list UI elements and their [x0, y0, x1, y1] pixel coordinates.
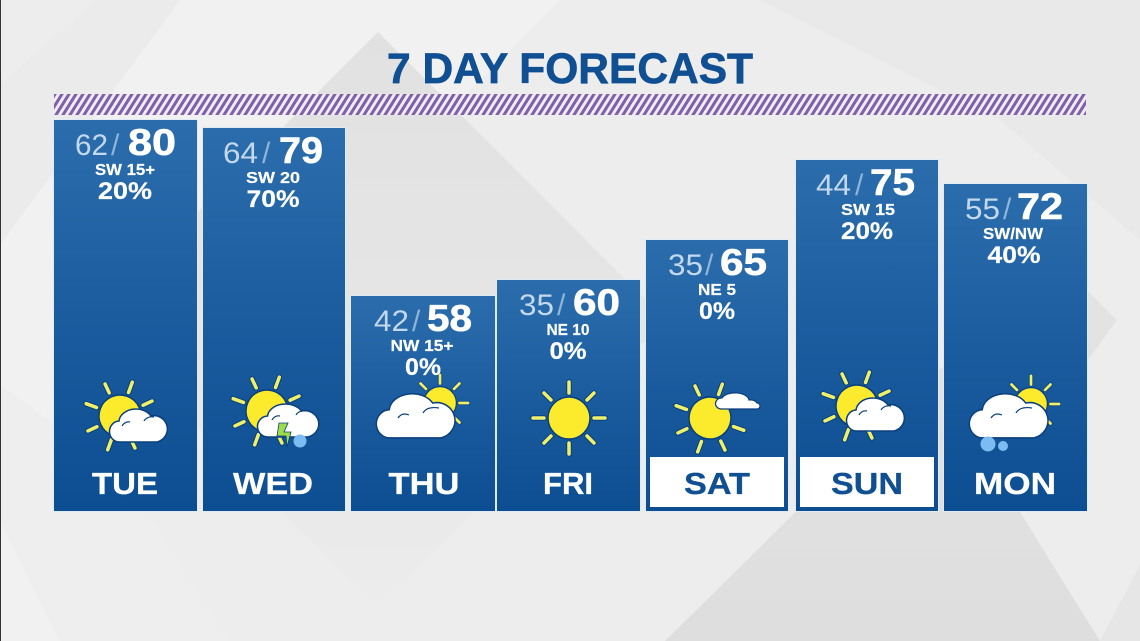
day label box [800, 457, 934, 507]
day label: SUN [831, 466, 903, 501]
panel: Saturday [646, 240, 788, 511]
temperatures: 62/80: 80 [128, 122, 176, 163]
temperatures: 64/79: 64 [223, 137, 258, 170]
temperatures: 55/72: 55 [965, 193, 1000, 226]
temperatures: 42/58 [374, 298, 472, 339]
temperatures: 55/72: 72 [1017, 186, 1063, 227]
temperatures: 44/75 [816, 162, 915, 203]
temperatures: 35/65 [668, 242, 767, 283]
temperatures: 62/80 [75, 122, 176, 163]
icon: partly cloudy [74, 370, 167, 462]
temperatures: 55/72 [965, 186, 1063, 227]
icon: partly cloudy [811, 360, 904, 452]
title: 7 DAY FORECAST [387, 45, 753, 93]
day label: SAT [684, 466, 750, 501]
day label: TUE [92, 466, 158, 501]
precipitation chance: 40% [988, 242, 1040, 269]
temperatures: 64/79: / [262, 137, 271, 170]
panel: Sunday [796, 160, 938, 511]
hatched band [54, 94, 1086, 115]
day label: MON [974, 466, 1056, 501]
panel: Wednesday [203, 128, 345, 511]
precipitation chance: 0% [699, 298, 735, 325]
wind: SW 20 [246, 170, 300, 187]
precipitation chance: 20% [841, 218, 893, 245]
icon: mostly sunny [664, 372, 760, 464]
temperatures: 42/58: / [412, 305, 421, 338]
precipitation chance: 70% [246, 186, 300, 213]
temperatures: 35/60: 35 [519, 289, 554, 322]
wind: SW 15 [841, 202, 895, 219]
day label box [650, 457, 784, 507]
icon: sunny [533, 382, 605, 454]
temperatures: 44/75: 44 [816, 169, 851, 202]
temperatures: 64/79: 79 [279, 130, 323, 171]
wind: NE 10 [546, 322, 590, 339]
day label: FRI [543, 466, 593, 501]
temperatures: 35/60 [519, 282, 620, 323]
wind: SW/NW [983, 226, 1044, 243]
temperatures: 35/65: 35 [668, 249, 703, 282]
precipitation chance: 20% [98, 178, 152, 205]
temperatures: 62/80: / [111, 129, 120, 162]
precipitation chance: 0% [550, 338, 586, 365]
icon: showers [969, 376, 1059, 452]
wind: NW 15+ [390, 338, 454, 355]
temperatures: 35/65: / [705, 249, 714, 282]
day label: THU [388, 466, 460, 501]
temperatures: 42/58: 42 [374, 305, 409, 338]
icon: thunderstorm [221, 365, 319, 457]
wind: SW 15+ [95, 162, 155, 179]
precipitation chance: 0% [405, 354, 441, 381]
temperatures: 64/79 [223, 130, 323, 171]
temperatures: 55/72: / [1003, 193, 1012, 226]
temperatures: 35/60: / [557, 289, 566, 322]
temperatures: 42/58: 58 [427, 298, 472, 339]
temperatures: 35/60: 60 [573, 282, 620, 323]
panel: Tuesday [54, 120, 197, 511]
day label: WED [233, 466, 313, 501]
panel: Thursday [351, 296, 495, 511]
temperatures: 44/75: / [855, 169, 864, 202]
panel: Friday [497, 280, 640, 511]
panel: Monday [944, 184, 1087, 511]
wind: NE 5 [698, 282, 736, 299]
temperatures: 44/75: 75 [870, 162, 915, 203]
icon: mostly cloudy [376, 375, 468, 438]
temperatures: 35/65: 65 [720, 242, 767, 283]
temperatures: 62/80: 62 [75, 129, 108, 162]
